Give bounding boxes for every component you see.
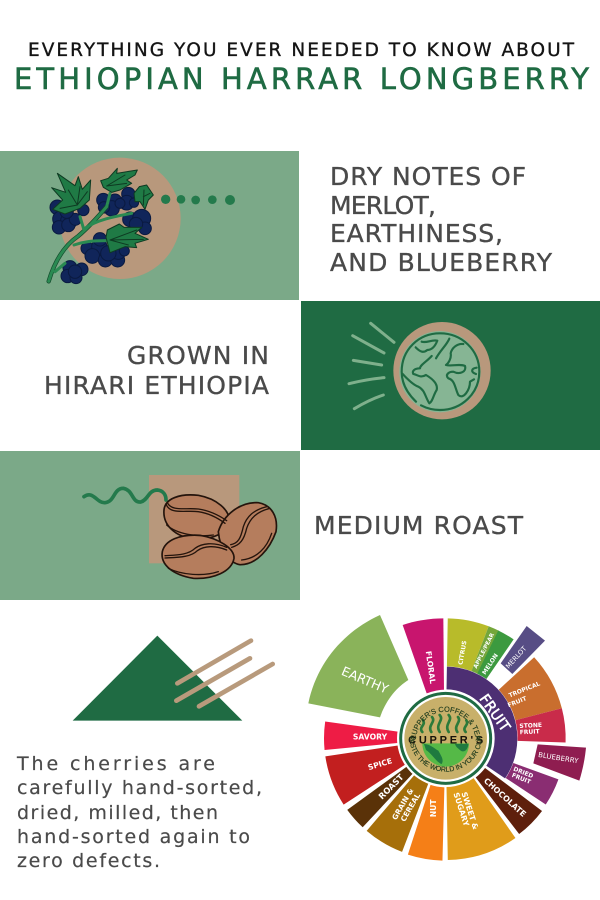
icon: globe rays: [349, 323, 394, 409]
flavor wheel labels: NUT: [429, 799, 438, 817]
logo: Cupper's: [397, 690, 494, 787]
text: origin: GROWN IN: [127, 341, 269, 370]
flavor wheel labels: APPLE/PEAR: [473, 632, 496, 670]
icon: dotted line: [161, 195, 235, 205]
text: tasting notes: [330, 162, 553, 277]
text: process description: [16, 753, 262, 872]
flavor wheel labels: MELON: [481, 652, 500, 676]
icon: blueberry branch: [49, 158, 235, 284]
logo: Cupper's: CUPPER'S COFFEE & TEA: [410, 706, 480, 741]
flavor wheel labels: CITRUS: [457, 640, 468, 665]
flavor wheel labels: BLUEBERRY: [538, 751, 580, 765]
text: process description: dried, milled, then: [17, 802, 218, 824]
flavor wheel labels: CHOCOLATE: [482, 776, 528, 819]
flavor wheel labels: SUGARY: [451, 791, 471, 828]
flavor wheel labels: STONE: [519, 722, 542, 730]
flavor wheel labels: GRAIN &: [390, 786, 416, 821]
text: process description: carefully hand-sorted,: [17, 777, 262, 799]
text: origin: HIRARI ETHIOPIA: [44, 371, 269, 400]
panel: origin: [44, 301, 600, 450]
flavor wheel labels: CEREAL: [399, 791, 422, 823]
title: EVERYTHING YOU EVER NEEDED TO KNOW ABOUT: [28, 40, 575, 61]
icon: coffee beans: [84, 475, 276, 578]
logo: Cupper's: TASTE THE WORLD IN YOUR CUP: [409, 736, 482, 772]
panel: roast: [0, 451, 524, 600]
flavor wheel labels: FRUIT: [520, 728, 541, 736]
text: process description: zero defects.: [17, 850, 160, 872]
flavor wheel labels: FRUIT: [511, 772, 532, 786]
flavor wheel labels: [339, 632, 580, 831]
title: [14, 40, 589, 96]
flavor wheel labels: SWEET &: [460, 791, 480, 831]
icon: triangle with lines: [73, 636, 273, 721]
text: tasting notes: MERLOT,: [330, 191, 436, 220]
flavor wheel labels: SAVORY: [353, 733, 388, 742]
panel: tasting notes: [0, 151, 553, 300]
text: process description: hand-sorted again to: [17, 826, 250, 848]
flavor wheel labels: ROAST: [376, 772, 406, 801]
text: tasting notes: AND BLUEBERRY: [330, 248, 553, 277]
text: process description: The cherries are: [16, 753, 215, 775]
text: roast: MEDIUM ROAST: [314, 511, 524, 540]
flavor wheel labels: DRIED: [512, 766, 534, 780]
flavor wheel labels: FRUIT: [507, 695, 529, 709]
flavor wheel labels: FRUIT: [476, 692, 513, 735]
icon: globe: [349, 322, 491, 419]
title: ETHIOPIAN HARRAR LONGBERRY: [14, 62, 589, 96]
chart: coffee flavor wheel: [308, 615, 586, 861]
text: tasting notes: EARTHINESS,: [330, 219, 503, 248]
logo: Cupper's: CUPPER'S: [408, 734, 483, 746]
flavor wheel labels: TROPICAL: [508, 680, 541, 699]
text: origin: [44, 341, 269, 400]
flavor wheel labels: FLORAL: [424, 650, 437, 684]
flavor wheel labels: MERLOT: [504, 644, 529, 670]
flavor wheel labels: EARTHY: [339, 663, 391, 697]
flavor wheel labels: SPICE: [367, 756, 393, 772]
text: tasting notes: DRY NOTES OF: [330, 162, 526, 191]
